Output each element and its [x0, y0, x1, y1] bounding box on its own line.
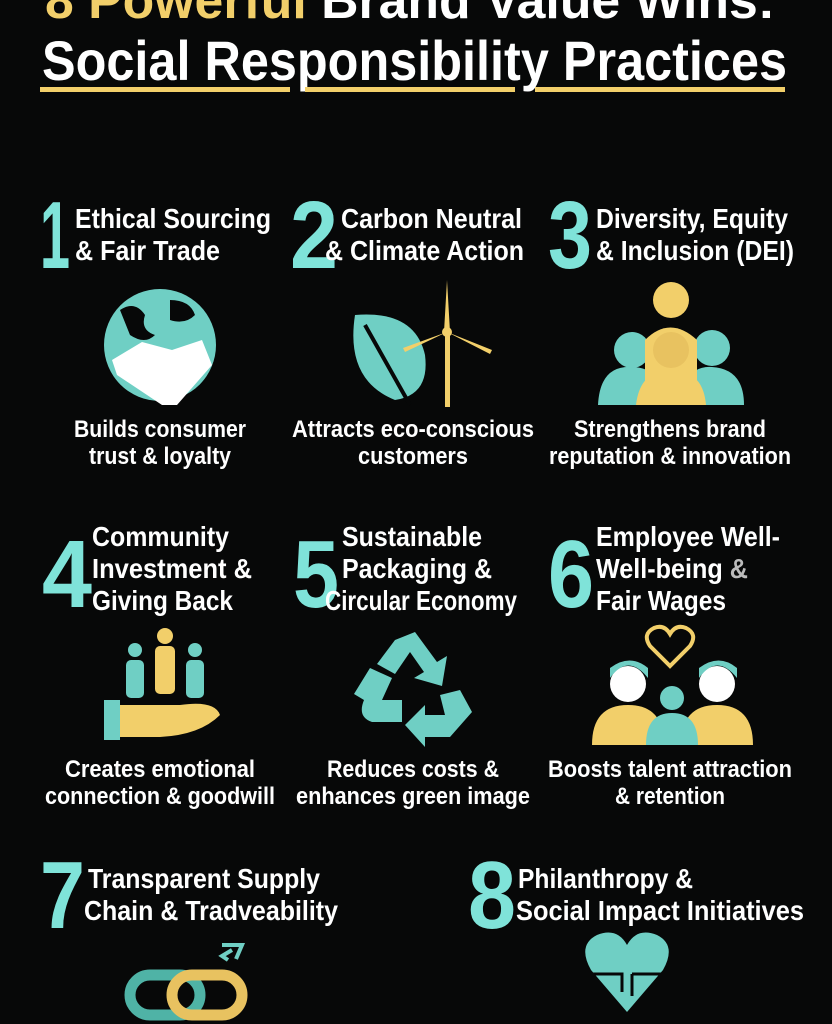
item 5 heading: 5 [293, 521, 339, 628]
item 3 heading [548, 182, 794, 289]
item 1 benefit: trust & loyalty [89, 443, 232, 470]
icon: chain links [130, 945, 242, 1015]
icon: diverse people [598, 282, 744, 405]
item 7 heading: Transparent Supply [88, 863, 320, 894]
item 4 heading: Investment & [92, 553, 252, 584]
item 7 heading [40, 842, 338, 949]
item 5 heading: Sustainable [342, 521, 482, 552]
item 8 heading [468, 842, 804, 949]
item 2 benefit: Attracts eco-conscious [292, 416, 534, 443]
item 2 heading: 2 [290, 182, 338, 289]
item 6 benefit: & retention [615, 783, 725, 810]
item 6 heading [548, 521, 780, 628]
item 3 benefit [549, 416, 791, 470]
item 1 benefit [74, 416, 246, 470]
icon: employees with heart [592, 627, 753, 745]
item 1 heading: Ethical Sourcing [75, 203, 271, 234]
item 3 heading: & Inclusion (DEI) [596, 235, 794, 266]
item 3 heading: 3 [548, 182, 592, 289]
item 8 heading: Social Impact Initiatives [516, 895, 804, 926]
item 4 heading: Community [92, 521, 229, 552]
item 7 heading: Chain & Tradveability [84, 895, 338, 926]
item 6 heading: Well-being & [596, 553, 748, 584]
item 3 benefit: Strengthens brand [574, 416, 766, 443]
item 5 benefit [296, 756, 530, 810]
item 7 heading: 7 [40, 842, 85, 949]
item 2 benefit [292, 416, 534, 470]
item 3 benefit: reputation & innovation [549, 443, 791, 470]
item 1 heading: & Fair Trade [75, 235, 220, 266]
item 4 benefit [45, 756, 275, 810]
item 5 heading: Circular Economy [325, 585, 517, 616]
item 2 heading: & Climate Action [325, 235, 524, 266]
icon: leaf and wind turbine [353, 280, 492, 407]
item 4 heading: 4 [42, 521, 92, 628]
item 4 benefit: Creates emotional [65, 756, 255, 783]
item 3 heading: Diversity, Equity [596, 203, 788, 234]
item 6 benefit: Boosts talent attraction [548, 756, 792, 783]
item 1 heading [40, 182, 271, 289]
item 6 benefit [548, 756, 792, 810]
item 8 heading: 8 [468, 842, 516, 949]
item 2 heading: Carbon Neutral [341, 203, 522, 234]
item 6 heading: 6 [548, 521, 594, 628]
item 4 heading [42, 521, 252, 628]
icon: recycle [354, 632, 472, 747]
item 4 benefit: connection & goodwill [45, 783, 275, 810]
item 1 heading: 1 [40, 182, 70, 289]
item 8 heading: Philanthropy & [518, 863, 693, 894]
item 5 benefit: Reduces costs & [327, 756, 499, 783]
icon: hand with people [104, 628, 220, 740]
item 5 heading: Packaging & [342, 553, 492, 584]
icon: heart [585, 933, 669, 1012]
item 6 heading: Employee Well- [596, 521, 780, 552]
item 2 benefit: customers [358, 443, 468, 470]
item 1 benefit: Builds consumer [74, 416, 246, 443]
icon: globe handshake [104, 289, 216, 405]
item 4 heading: Giving Back [92, 585, 233, 616]
item 5 heading [293, 521, 517, 628]
title [40, 0, 787, 92]
item 6 heading: Fair Wages [596, 585, 726, 616]
item 5 benefit: enhances green image [296, 783, 530, 810]
item 2 heading [290, 182, 524, 289]
